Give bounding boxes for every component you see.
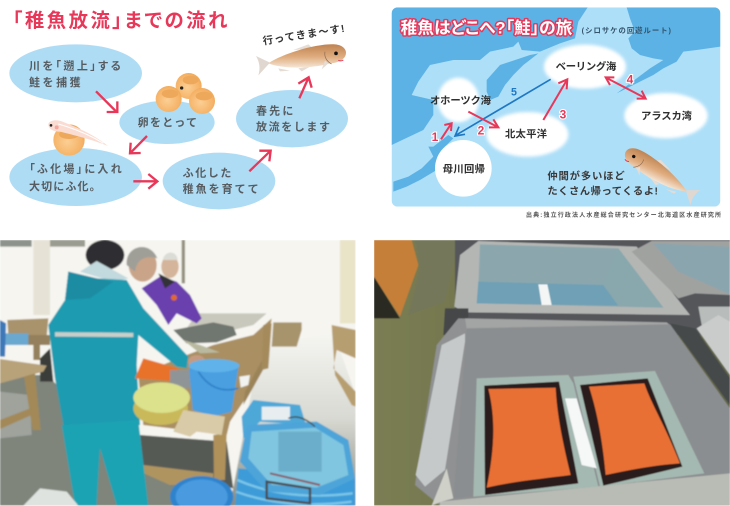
photo: workers collecting eggs (0, 240, 356, 506)
map label: North Pacific: 北太平洋 (505, 128, 547, 141)
map label: Sea of Okhotsk: オホーツク海 (430, 94, 492, 107)
flow step 5: spring release: 春先に (256, 104, 293, 118)
map message: 仲間が多いほど (547, 169, 625, 182)
map label: Sea of Okhotsk (430, 78, 492, 122)
map label: Bering Sea (544, 45, 626, 89)
flow step 3: hatchery (9, 148, 142, 206)
panel: release flow diagram (9, 9, 348, 209)
arrow: step 3 to 4 (133, 174, 157, 189)
map label: Gulf of Alaska (624, 93, 708, 138)
map label: North Pacific (486, 112, 568, 157)
arrow: route 3 (543, 79, 567, 120)
route number 4: 4 (627, 73, 634, 87)
flow step 1: catching salmon (9, 44, 142, 102)
arrow: step 5 to fish (298, 77, 312, 98)
flow step 2: collecting eggs: 卵をとって (138, 115, 197, 129)
flow step 5: spring release (236, 90, 348, 147)
flow step 4: raising fry (163, 153, 275, 209)
source caption: 出典:独立行政法人水産総合研究センター北海道区水産研究所 (526, 211, 721, 219)
route number 1: 1 (432, 130, 439, 144)
flow step 3: hatchery: 「ふ化場」に入れ (29, 162, 122, 176)
route number 5: 5 (511, 86, 517, 98)
map label: return to home river: 母川回帰 (443, 164, 485, 176)
photo: salmon eggs in incubation trays (374, 240, 730, 506)
arrow: route 5 returning (455, 79, 551, 136)
map message: たくさん帰ってくるよ! (547, 185, 658, 197)
flow step 1: catching salmon: 鮭を捕獲 (29, 75, 81, 89)
arrow: step 2 to 3 (130, 136, 147, 153)
icon: salmon on map (617, 145, 705, 206)
flow step 1: catching salmon: 川を「遡上」する (29, 58, 121, 72)
map background (392, 7, 720, 207)
flow step 4: raising fry: ふ化した (183, 166, 231, 179)
map label: Gulf of Alaska: アラスカ湾 (641, 109, 693, 122)
arrow: step 1 to 2 (96, 91, 117, 112)
arrow: route 4 (606, 77, 646, 99)
icon: three salmon eggs (156, 73, 215, 114)
map message (547, 169, 658, 197)
flow step 5: spring release: 放流をします (256, 120, 330, 134)
panel: salmon journey map (392, 7, 721, 219)
flow step 2: collecting eggs (119, 101, 215, 144)
arrow: step 4 to 5 (249, 151, 271, 171)
icon: salmon smolt (256, 44, 346, 75)
map label: Bering Sea: ベーリング海 (556, 60, 617, 73)
route number 3: 3 (560, 107, 567, 121)
route subtitle: (シロサケの回遊ルート) (582, 26, 672, 35)
arrow: route 1 (441, 123, 452, 139)
speech text: 行ってきま〜す! (262, 22, 345, 48)
route number 2: 2 (478, 123, 485, 137)
arrow: route 2 (468, 112, 498, 127)
flow step 4: raising fry: 稚魚を育てて (183, 182, 259, 196)
icon: hatchling on egg (48, 120, 108, 156)
map label: return to home river (435, 140, 492, 197)
title: 「稚魚放流」までの流れ (13, 9, 227, 32)
flow step 3: hatchery: 大切にふ化。 (29, 179, 101, 193)
map title: 稚魚はどこへ?「鮭」の旅 (401, 17, 573, 37)
